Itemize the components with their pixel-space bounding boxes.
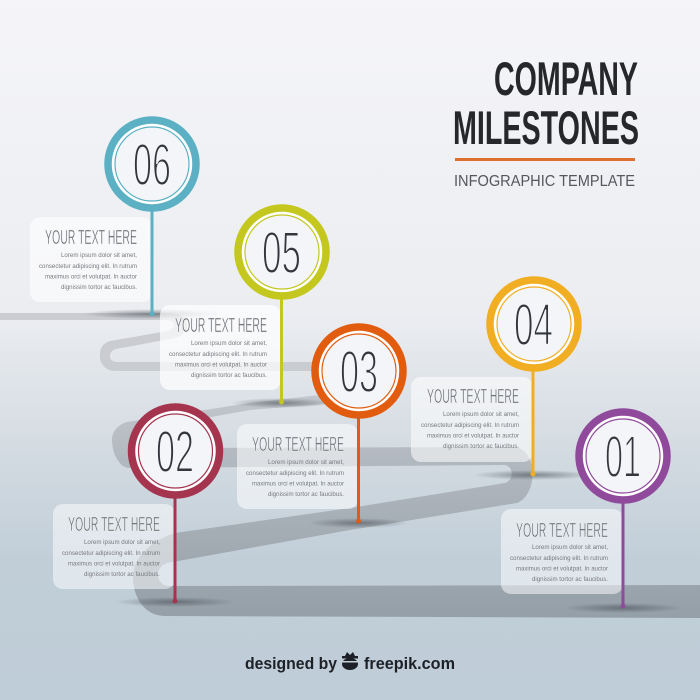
body text 03: Lorem ipsum dolor sit amet,	[268, 459, 344, 466]
heading 05: YOUR TEXT HERE	[175, 314, 267, 337]
card 01	[501, 509, 623, 594]
body text 04: dignissim tortor ac faucibus.	[443, 443, 519, 450]
body text 03: maximus orci et volutpat. In auctor	[252, 480, 344, 488]
card 03	[237, 424, 358, 509]
body text 06: consectetur adipiscing elit. In rutrum	[39, 263, 137, 270]
body text 01: Lorem ipsum dolor sit amet,	[532, 544, 608, 551]
panel: milestone 05	[160, 208, 326, 404]
panel: milestone 04	[411, 280, 578, 476]
subtitle: INFOGRAPHIC TEMPLATE	[454, 173, 635, 190]
body text 03: dignissim tortor ac faucibus.	[268, 491, 344, 498]
body text 02: consectetur adipiscing elit. In rutrum	[62, 550, 160, 557]
body text 06: dignissim tortor ac faucibus.	[61, 284, 137, 291]
body text 05	[169, 340, 267, 379]
number 01: 01	[605, 424, 641, 490]
icon: freepik logo	[340, 652, 360, 670]
body text 02: dignissim tortor ac faucibus.	[84, 571, 160, 578]
heading 01: YOUR TEXT HERE	[516, 519, 608, 542]
pin 05	[238, 208, 326, 404]
panel: milestone 01	[501, 412, 667, 608]
footer credit: designed by	[245, 655, 338, 673]
pin 04	[490, 280, 578, 476]
pin 03	[315, 327, 403, 524]
pin 01	[579, 412, 667, 608]
body text 04: maximus orci et volutpat. In auctor	[427, 432, 519, 440]
title	[453, 52, 639, 154]
heading 02: YOUR TEXT HERE	[68, 513, 160, 536]
body text 06: Lorem ipsum dolor sit amet,	[61, 252, 137, 259]
footer credit: freepik.com	[364, 654, 455, 673]
body text 01: consectetur adipiscing elit. In rutrum	[510, 555, 608, 562]
pin 02	[132, 407, 220, 604]
body text 02	[62, 539, 160, 578]
card 04	[411, 377, 533, 462]
footer credit	[245, 652, 455, 673]
body text 04	[421, 411, 519, 450]
body text 05: dignissim tortor ac faucibus.	[191, 372, 267, 379]
pin 06	[108, 120, 196, 316]
card 02	[53, 504, 175, 589]
panel: milestone 02	[53, 407, 220, 604]
panel: milestone 03	[237, 327, 403, 524]
heading 06: YOUR TEXT HERE	[45, 226, 137, 249]
panel: milestone 06	[30, 120, 196, 316]
winding road	[0, 313, 700, 618]
body text 04: consectetur adipiscing elit. In rutrum	[421, 422, 519, 429]
body text 03: consectetur adipiscing elit. In rutrum	[246, 470, 344, 477]
pin shadows	[82, 309, 683, 613]
body text 05: consectetur adipiscing elit. In rutrum	[169, 351, 267, 358]
body text 02: Lorem ipsum dolor sit amet,	[84, 539, 160, 546]
card 06	[30, 217, 152, 302]
card 05	[160, 305, 281, 390]
number 06: 06	[133, 132, 171, 198]
number 04: 04	[514, 292, 553, 358]
body text 03	[246, 459, 344, 498]
body text 02: maximus orci et volutpat. In auctor	[68, 560, 160, 568]
number 03: 03	[340, 339, 378, 405]
body text 01: dignissim tortor ac faucibus.	[532, 576, 608, 583]
number 05: 05	[262, 220, 301, 286]
body text 05: maximus orci et volutpat. In auctor	[175, 362, 267, 368]
body text 05: Lorem ipsum dolor sit amet,	[191, 340, 267, 347]
heading 04: YOUR TEXT HERE	[427, 385, 519, 408]
title divider	[455, 158, 635, 161]
body text 01	[510, 544, 608, 583]
body text 01: maximus orci et volutpat. In auctor	[516, 566, 608, 572]
body text 04: Lorem ipsum dolor sit amet,	[443, 411, 519, 418]
number 02: 02	[156, 419, 194, 485]
body text 06: maximus orci et volutpat. In auctor	[45, 274, 137, 280]
heading 03: YOUR TEXT HERE	[252, 433, 344, 456]
body text 06	[39, 252, 137, 291]
